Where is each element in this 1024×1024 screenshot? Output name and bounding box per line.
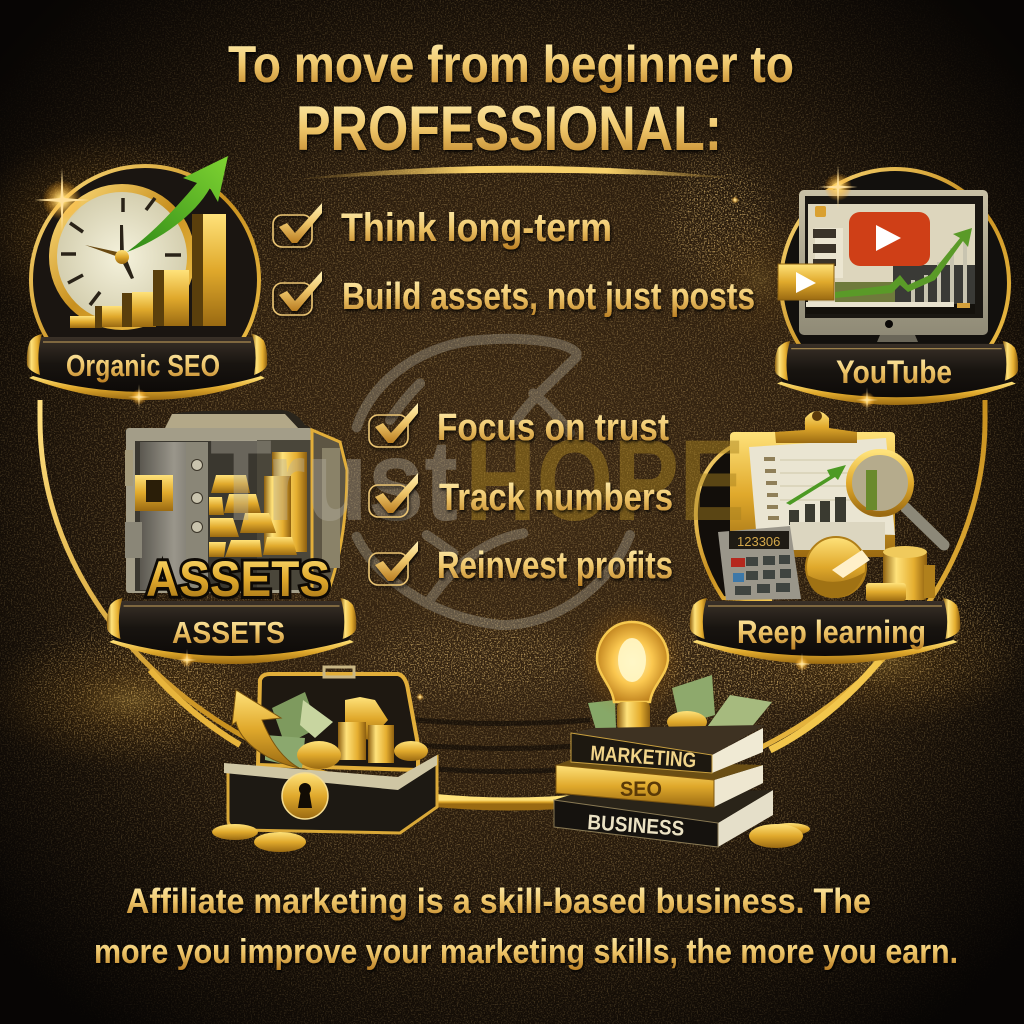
- label banner: ASSETS: [107, 598, 356, 664]
- icon: medallion: [31, 166, 259, 394]
- label banner: YouTube: [775, 341, 1018, 405]
- icon: calculator: [718, 526, 801, 600]
- icon: chest lid: [258, 674, 418, 770]
- title: PROFESSIONAL:: [296, 94, 722, 164]
- icon: gold play box: [778, 264, 834, 300]
- icon: coin pile: [749, 823, 810, 848]
- book: Marketing: MARKETING: [590, 742, 697, 772]
- icon: cash and gold contents: [265, 692, 428, 769]
- panel: Keep learning: [690, 411, 960, 664]
- label banner: YouTube: YouTube: [836, 354, 952, 390]
- central stage steps: [415, 720, 590, 772]
- icon: red play button: [849, 212, 930, 266]
- book: SEO: [556, 760, 763, 807]
- icon: cash behind bulb: [588, 675, 772, 735]
- panel: Organic SEO: [27, 156, 267, 400]
- checklist: center: [369, 403, 673, 587]
- icon: safe: [125, 410, 347, 593]
- icon: clipboard: [730, 411, 895, 557]
- book: Business: [554, 790, 773, 847]
- icon: gold bowl: [806, 537, 870, 598]
- icon: coin stacks: [866, 546, 935, 601]
- panel: books and light bulb: [554, 600, 810, 848]
- watermark: globe and wordmark: Trust: [210, 417, 458, 545]
- checklist: top: Build assets, not just posts: [342, 276, 755, 318]
- icon: keyhole badge: [282, 773, 328, 819]
- icon: calculator: 123306: [737, 534, 780, 549]
- title: To move from beginner to: [228, 36, 794, 94]
- label banner: Organic SEO: [27, 334, 267, 400]
- checklist: center: Reinvest profits: [437, 545, 673, 587]
- book: Business: BUSINESS: [587, 811, 685, 841]
- icon: light bulb: [577, 600, 687, 730]
- checklist: top: Think long-term: [341, 206, 612, 250]
- checklist: top: [273, 203, 755, 318]
- checklist: center: Focus on trust: [437, 407, 669, 449]
- sparkles: [34, 165, 878, 703]
- label banner: ASSETS: ASSETS: [172, 615, 285, 650]
- panel: Assets: [107, 410, 356, 664]
- closing statement: Affiliate marketing is a skill-based business. The: [126, 882, 871, 921]
- panel: YouTube: [775, 169, 1018, 405]
- book: SEO: SEO: [620, 778, 662, 801]
- icon: green arrow: [127, 156, 228, 252]
- large gold ring: [40, 400, 985, 805]
- icon: chest body: [228, 757, 437, 833]
- label banner: Reep learning: [690, 598, 960, 664]
- checklist: center: Track numbers: [439, 477, 673, 519]
- large ASSETS lettering: ASSETS: [146, 551, 330, 607]
- icon: loose coins: [212, 824, 306, 852]
- icon: clock: [53, 188, 191, 326]
- icon: gold bars and coin stack: [209, 452, 307, 557]
- label banner: Reep learning: Reep learning: [737, 614, 926, 650]
- label banner: Organic SEO: Organic SEO: [66, 348, 220, 383]
- chest trim: [224, 755, 437, 790]
- title underline swoosh: [290, 166, 742, 180]
- icon: medallion: [781, 169, 1009, 397]
- icon: monitor: [799, 190, 988, 342]
- icon: medallion crescent: [696, 445, 770, 600]
- book: Marketing: [571, 725, 765, 773]
- title: [228, 36, 794, 164]
- icon: gold arrow: [232, 690, 299, 768]
- panel: treasure chest: [212, 667, 437, 852]
- icon: magnifier: [849, 452, 944, 545]
- icon: growth line: [835, 228, 972, 298]
- watermark: globe and wordmark: [210, 339, 745, 625]
- watermark: globe and wordmark: HOPE: [465, 417, 745, 545]
- icon: handle: [324, 667, 354, 677]
- bar chart: [70, 214, 226, 328]
- closing statement: [94, 882, 958, 971]
